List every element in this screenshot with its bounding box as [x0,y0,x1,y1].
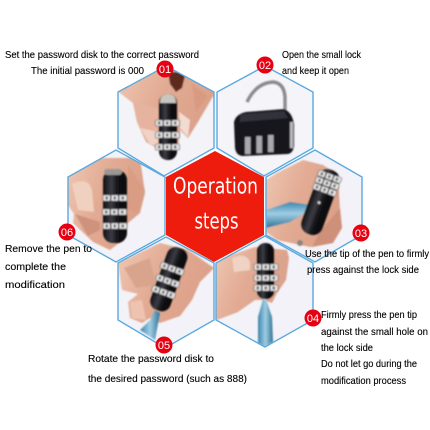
text: step 03 caption: press against the lock side [307,264,419,276]
badge 02 [256,56,274,74]
text: step 02 caption: Open the small lock [282,49,362,61]
badge 02: 02 [259,60,271,72]
text: step 03 caption [305,248,430,276]
text: step 05 caption: the desired password (such as 888) [88,373,247,385]
badge 03: 03 [355,228,367,240]
text: step 01 caption: The initial password is 000 [31,65,144,77]
text: step 05 caption: Rotate the password disk to [88,353,214,365]
icon: blue pen [140,310,160,340]
text: step 02 caption [282,49,362,77]
panel: step 02 photo [217,66,313,176]
panel: step 06 photo [66,150,165,262]
text: step 05 caption [88,353,247,385]
text: step 04 caption: the lock side [321,342,373,354]
icon: combination lock cylinder [254,243,278,299]
badge 03 [352,224,370,242]
text: step 06 caption: complete the [5,261,66,273]
badge 06: 06 [61,227,73,239]
icon: blue pen [258,299,273,347]
text: step 04 caption [321,309,428,387]
badge 05 [156,336,172,354]
badge 06 [58,224,76,240]
icon: tilted lock cylinder [146,244,191,314]
text: step 04 caption: modification process [321,375,406,387]
text: step 01 caption [5,49,199,77]
badge 01: 01 [159,64,171,76]
panel: step 03 photo [266,150,362,262]
badge 05: 05 [158,340,170,352]
heading: steps: steps [194,210,238,234]
panel: center red hexagon [166,151,264,262]
text: step 06 caption: Remove the pen to [5,243,92,255]
icon: open padlock [234,82,294,156]
icon: tilted lock cylinder [297,166,343,238]
text: step 02 caption: and keep it open [282,65,349,77]
badge 04 [304,310,322,326]
panel: step 04 photo [214,236,313,347]
icon: combination lock cylinder [102,169,127,243]
badge 01 [156,60,174,78]
panel: step 05 photo [118,237,214,348]
text: step 06 caption [5,243,92,291]
badge 04: 04 [307,313,319,325]
text: step 04 caption: Do not let go during the [321,358,417,370]
text: step 01 caption: Set the password disk to the correct password [5,49,199,61]
panel: step 01 photo [116,64,216,176]
icon: blue pen [266,202,312,228]
text: step 06 caption: modification [5,279,65,291]
text: step 04 caption: Firmly press the pen tip [321,309,417,321]
heading: Operation: Operation [173,174,258,200]
icon: combination lock cylinder [156,94,180,160]
